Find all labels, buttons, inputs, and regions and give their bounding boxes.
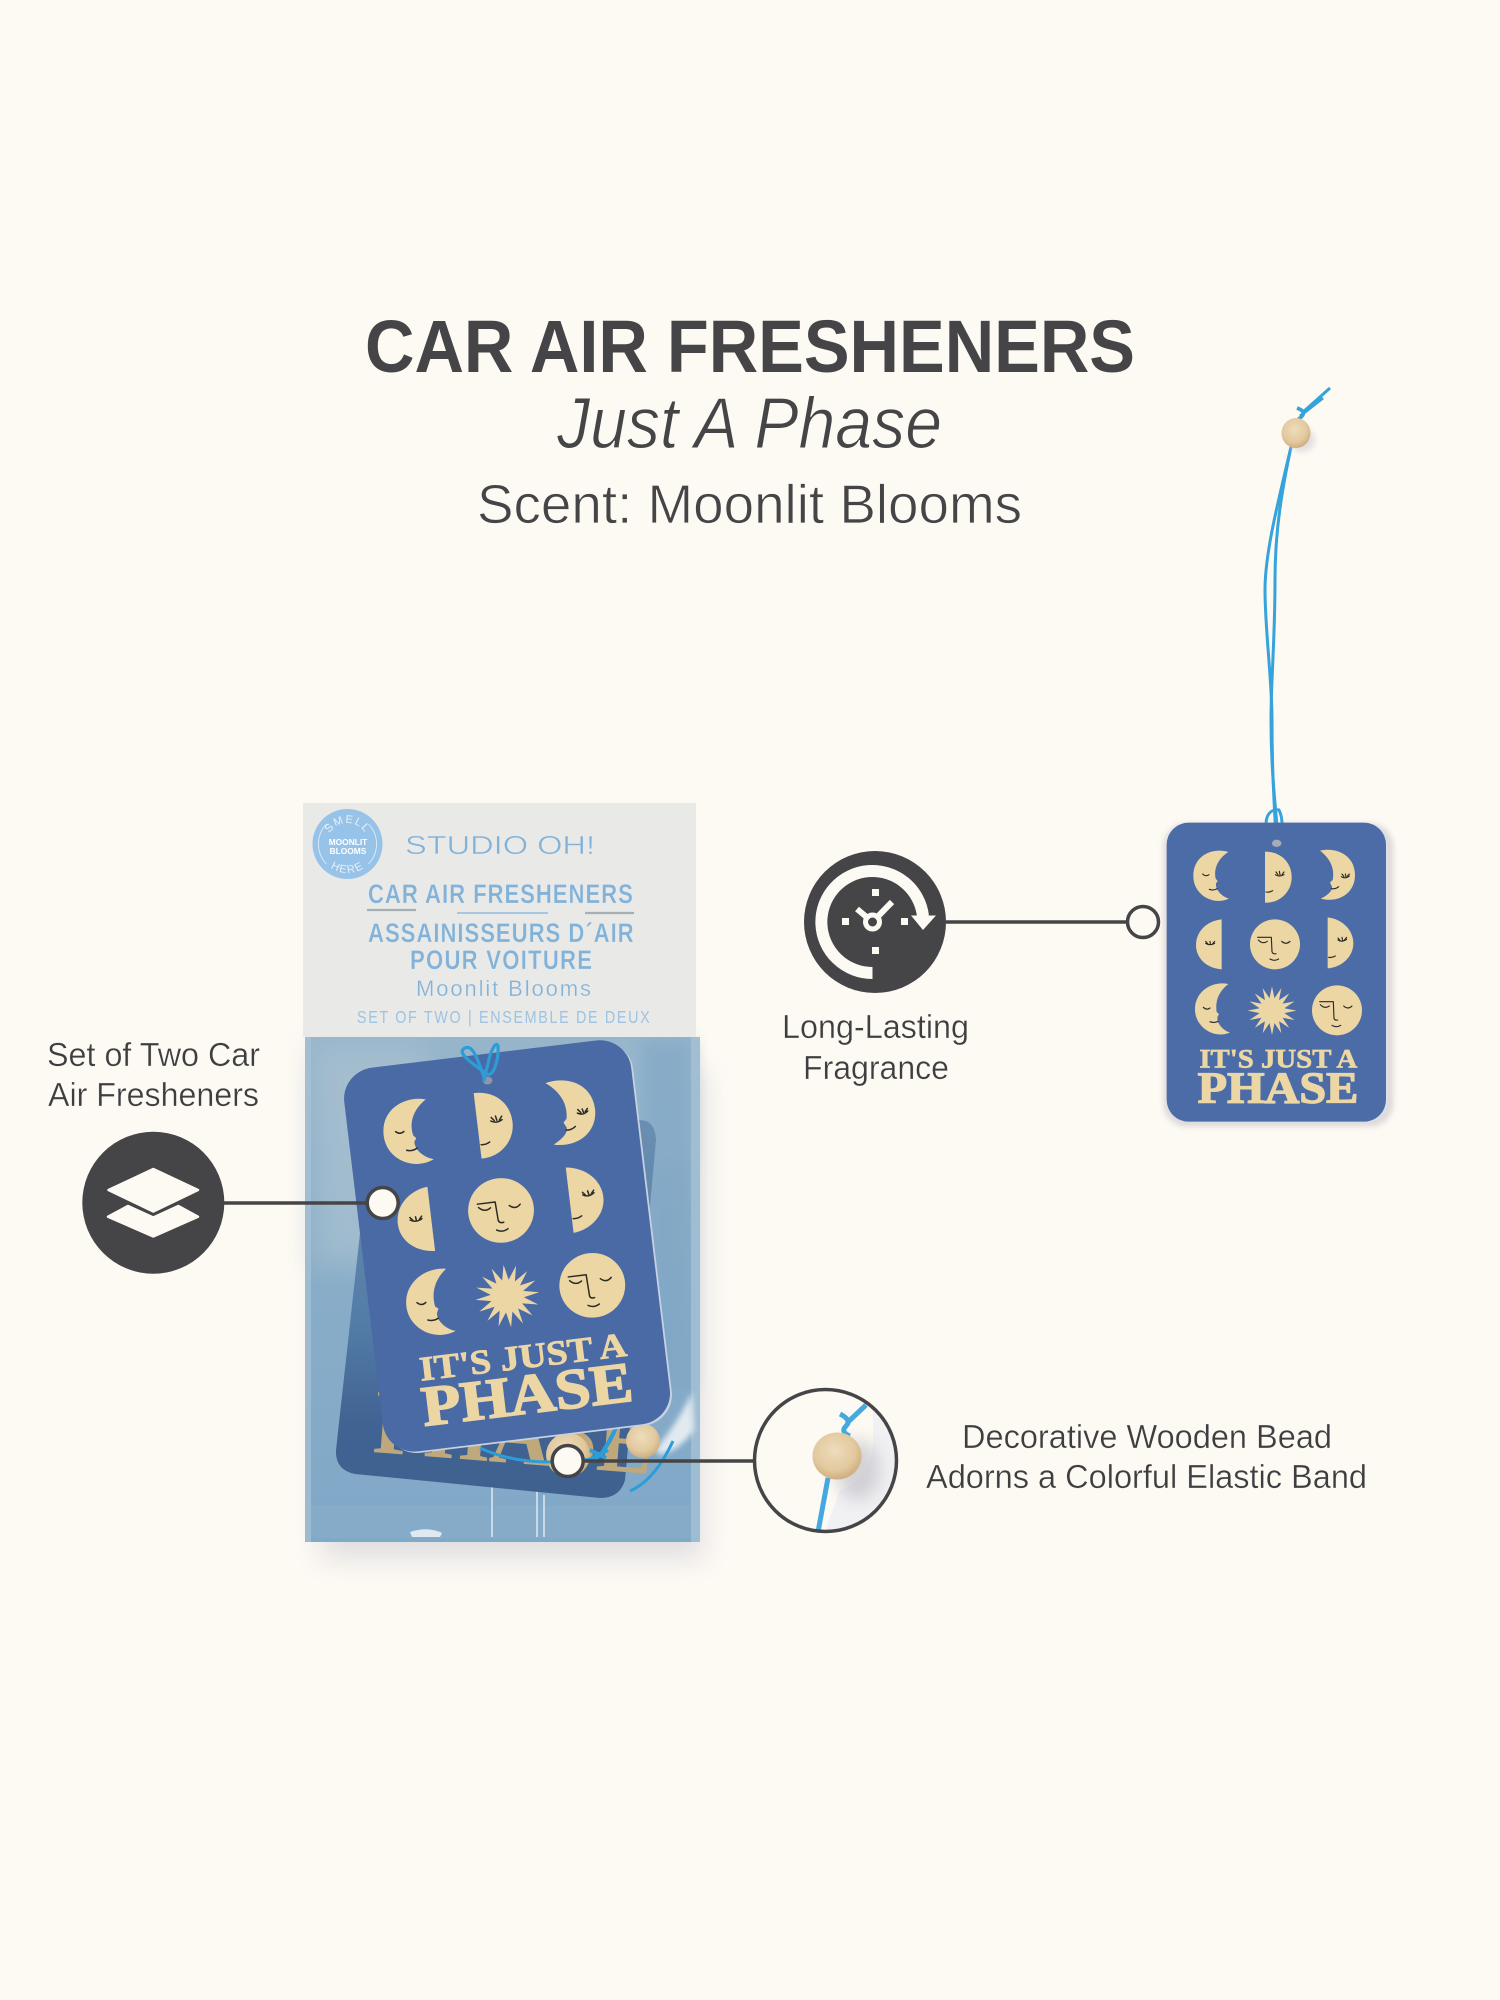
label: Set of Two Car (47, 1036, 260, 1073)
bead detail inset (754, 1390, 910, 1540)
marker dot (1128, 906, 1158, 938)
scent sticker (312, 809, 382, 879)
package heading: CAR AIR FRESHENERS (368, 880, 633, 910)
product package (300, 803, 710, 1566)
set of two line: SET OF TWO | ENSEMBLE DE DEUX (357, 1009, 650, 1027)
icon: clock with arrow (804, 851, 946, 993)
label: Long-Lasting (782, 1008, 969, 1045)
card text: IT'S JUST A (417, 1325, 629, 1389)
header card (303, 803, 696, 1037)
label: Adorns a Colorful Elastic Band (926, 1458, 1367, 1495)
card text: PHASE (418, 1351, 636, 1439)
connector (224, 1201, 368, 1205)
callout: long-lasting fragrance (782, 851, 1158, 1086)
brand logo: STUDIO OH! (405, 830, 595, 860)
connector (583, 1459, 754, 1463)
label: Fragrance (803, 1049, 949, 1086)
marker dot (367, 1188, 398, 1218)
title: Car Air Fresheners: CAR AIR FRESHENERS (365, 305, 1135, 388)
rear air freshener: PHASE (370, 1370, 658, 1494)
package shadow (322, 1070, 702, 1558)
package scent: Moonlit Blooms (416, 976, 591, 1001)
label (926, 1418, 1367, 1495)
scent sticker: HERE (331, 862, 363, 874)
title block (365, 305, 1135, 535)
clear bag (305, 1037, 700, 1542)
french heading line two: POUR VOITURE (410, 946, 592, 976)
front card cord loop (462, 1044, 498, 1082)
scent line: Scent: Moonlit Blooms (477, 473, 1022, 535)
front air freshener (341, 1036, 675, 1457)
card text: PHASE (1198, 1064, 1358, 1113)
scent sticker: SMELL (325, 815, 368, 832)
freshener card (1163, 823, 1393, 1127)
card text (415, 1325, 636, 1439)
label: Decorative Wooden Bead (962, 1418, 1332, 1455)
marker dot (552, 1446, 583, 1476)
callout: set of two (47, 1036, 398, 1274)
subtitle: Just A Phase: Just A Phase (556, 384, 942, 464)
label: Air Fresheners (48, 1076, 259, 1113)
scent sticker: MOONLIT (329, 837, 368, 847)
divider lines (367, 910, 634, 913)
rear air freshener (336, 1120, 673, 1498)
card text (1198, 1044, 1358, 1113)
elastic cord (1265, 388, 1330, 842)
card text: IT'S JUST A (1199, 1044, 1358, 1074)
wooden bead (1282, 418, 1315, 452)
hanging air freshener (1163, 388, 1393, 1127)
connector (946, 920, 1128, 924)
label (782, 1008, 969, 1086)
scent sticker: BLOOMS (330, 846, 367, 856)
french heading: ASSAINISSEURS D´AIR (368, 919, 634, 949)
callout: wooden bead (552, 1390, 1367, 1540)
label (47, 1036, 260, 1113)
icon: layers (82, 1132, 224, 1274)
